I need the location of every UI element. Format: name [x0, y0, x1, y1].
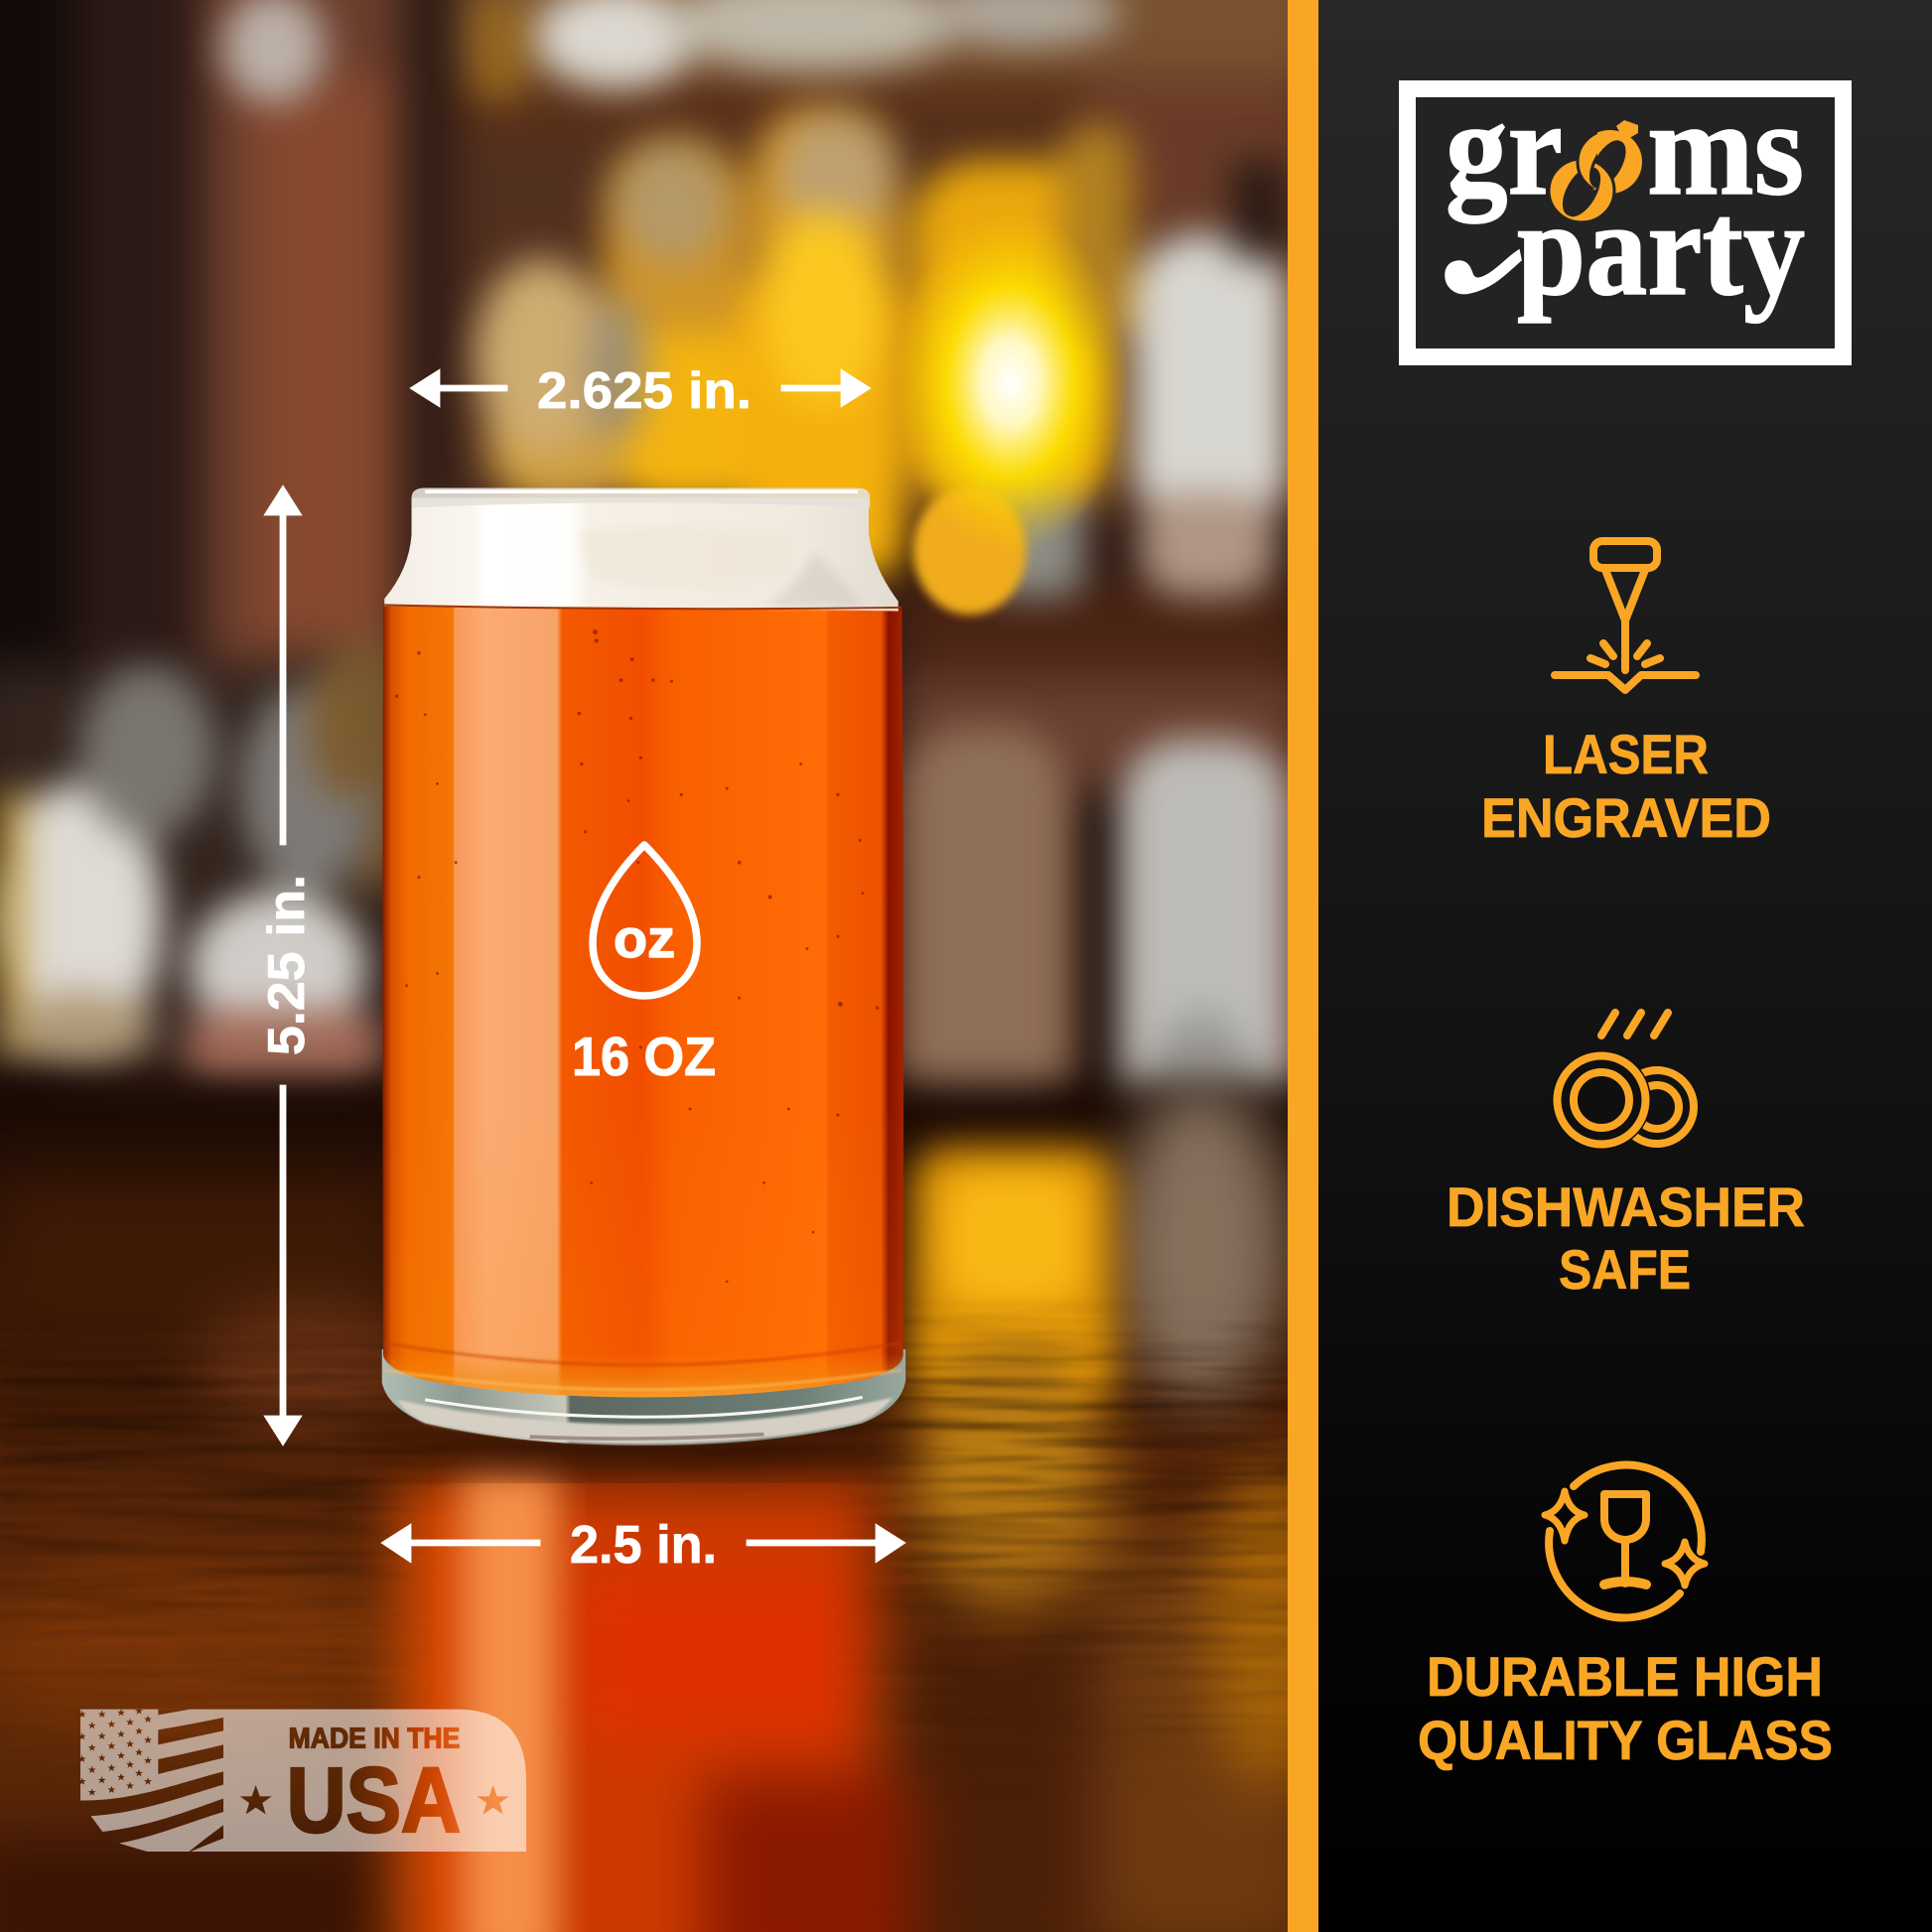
- icon: oz drop: [593, 845, 697, 996]
- icon: laser: [1555, 541, 1696, 690]
- beer reflection on table: [400, 1478, 911, 1932]
- label: [1418, 1645, 1833, 1771]
- shadow under glass: [366, 1432, 920, 1471]
- dimension: bottom width 2.5 in.: [381, 1515, 905, 1575]
- bubbles: [395, 629, 880, 1283]
- icon: plates: [1552, 1013, 1694, 1150]
- logo: grooms party: [1408, 74, 1843, 357]
- logo wordmark: gr: [1446, 74, 1563, 223]
- label: SAFE: [1559, 1238, 1691, 1301]
- foam head: [384, 497, 898, 612]
- label: DISHWASHER: [1447, 1175, 1805, 1238]
- dimension: bottom width 2.5 in.: 2.5 in.: [570, 1515, 717, 1575]
- golden bottle reflection: [911, 1146, 1115, 1516]
- label: DURABLE HIGH: [1427, 1645, 1823, 1708]
- logo wordmark: ms: [1647, 74, 1804, 223]
- panel: beer glass: [382, 487, 905, 1446]
- bright yellow glow: [894, 209, 1128, 554]
- icon: wine glass with sparkles: [1545, 1465, 1705, 1617]
- dimension: height 5.25 in.: 5.25 in.: [258, 875, 316, 1055]
- table wood grain: [0, 1304, 1288, 1731]
- logo rings: [1549, 120, 1642, 222]
- blurred shelves and bottles: [0, 0, 1324, 1159]
- label: [1447, 1175, 1805, 1301]
- logo wordmark: party: [1517, 175, 1805, 324]
- orange divider bar: [1288, 0, 1318, 1932]
- feature: durable high quality glass: [1418, 1465, 1833, 1771]
- dimension: top width 2.625 in.: [410, 362, 871, 420]
- label: LASER: [1543, 723, 1709, 785]
- background photo: blurred bar scene: [0, 0, 1368, 1932]
- blurred bottle highlights: [0, 0, 1288, 1257]
- label: QUALITY GLASS: [1418, 1709, 1833, 1771]
- dimension: top width 2.625 in.: 2.625 in.: [537, 362, 752, 420]
- label: [1481, 723, 1771, 849]
- bar table surface: [0, 1084, 1368, 1932]
- capacity callout: 16 oz: [572, 845, 716, 1087]
- glass base: [382, 1349, 905, 1446]
- amber bokeh ball: [913, 486, 1027, 615]
- logo wordmark: [1446, 74, 1805, 324]
- dimension: height 5.25 in.: [258, 485, 316, 1446]
- badge: made in the USA: [80, 1710, 526, 1852]
- icon: oz drop: oz: [614, 909, 675, 969]
- feature: laser engraved: [1481, 541, 1771, 849]
- label: ENGRAVED: [1481, 786, 1771, 849]
- blurred table reflections: [0, 1084, 1330, 1932]
- peach stripe in reflection: [462, 1472, 558, 1932]
- panel: features sidebar: [1318, 0, 1932, 1932]
- beer body: [382, 607, 903, 1397]
- capacity label: 16 OZ: [572, 1026, 716, 1087]
- glass rim: [412, 487, 870, 507]
- feature: dishwasher safe: [1447, 1013, 1805, 1301]
